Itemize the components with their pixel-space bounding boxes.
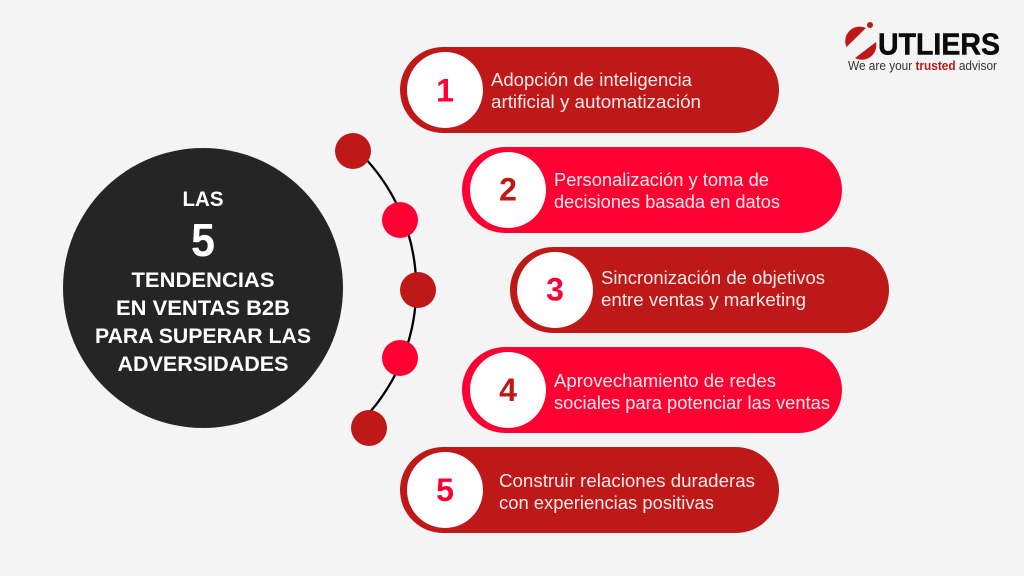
panel: central title circle <box>63 148 343 428</box>
heading: title text: LAS <box>182 188 224 211</box>
panel: trend 1: 1 <box>436 72 454 108</box>
panel: trend 3 <box>510 247 889 333</box>
heading: title text: 5 <box>191 214 215 266</box>
logo: Outliers: We are your trusted advisor <box>848 59 997 73</box>
panel: trend 1 <box>400 47 779 133</box>
timeline arc with nodes <box>335 133 436 446</box>
panel: trend 4 <box>462 347 842 433</box>
panel: trend 2: Personalización y toma de <box>554 170 769 190</box>
panel: trend 4: sociales para potenciar las ventas <box>554 393 830 413</box>
logo: Outliers <box>845 22 1000 73</box>
panel: trend 1: artificial y automatización <box>491 92 701 112</box>
panel: trend 2: decisiones basada en datos <box>554 192 780 212</box>
heading: title text: EN VENTAS B2B <box>116 297 290 320</box>
panel: trend 2: 2 <box>499 172 517 208</box>
panel: trend 4: Aprovechamiento de redes <box>554 371 776 391</box>
panel: trend 3: 3 <box>546 272 564 308</box>
logo: Outliers: UTLIERS <box>878 26 1000 62</box>
panel: trend 5: Construir relaciones duraderas <box>499 471 755 491</box>
panel: trend 3: entre ventas y marketing <box>601 290 806 310</box>
heading: title text: PARA SUPERAR LAS <box>95 325 311 348</box>
panel: trend 5 <box>400 447 779 533</box>
panel: trend 4: 4 <box>499 372 517 408</box>
heading: title text: ADVERSIDADES <box>118 353 288 376</box>
heading: title text: TENDENCIAS <box>132 269 274 292</box>
panel: trend 5: 5 <box>436 472 454 508</box>
panel: trend 2 <box>462 147 842 233</box>
panel: trend 1: Adopción de inteligencia <box>491 70 693 90</box>
panel: trend 3: Sincronización de objetivos <box>601 268 825 288</box>
heading: title text <box>95 188 311 376</box>
panel: trend 5: con experiencias positivas <box>499 493 714 513</box>
